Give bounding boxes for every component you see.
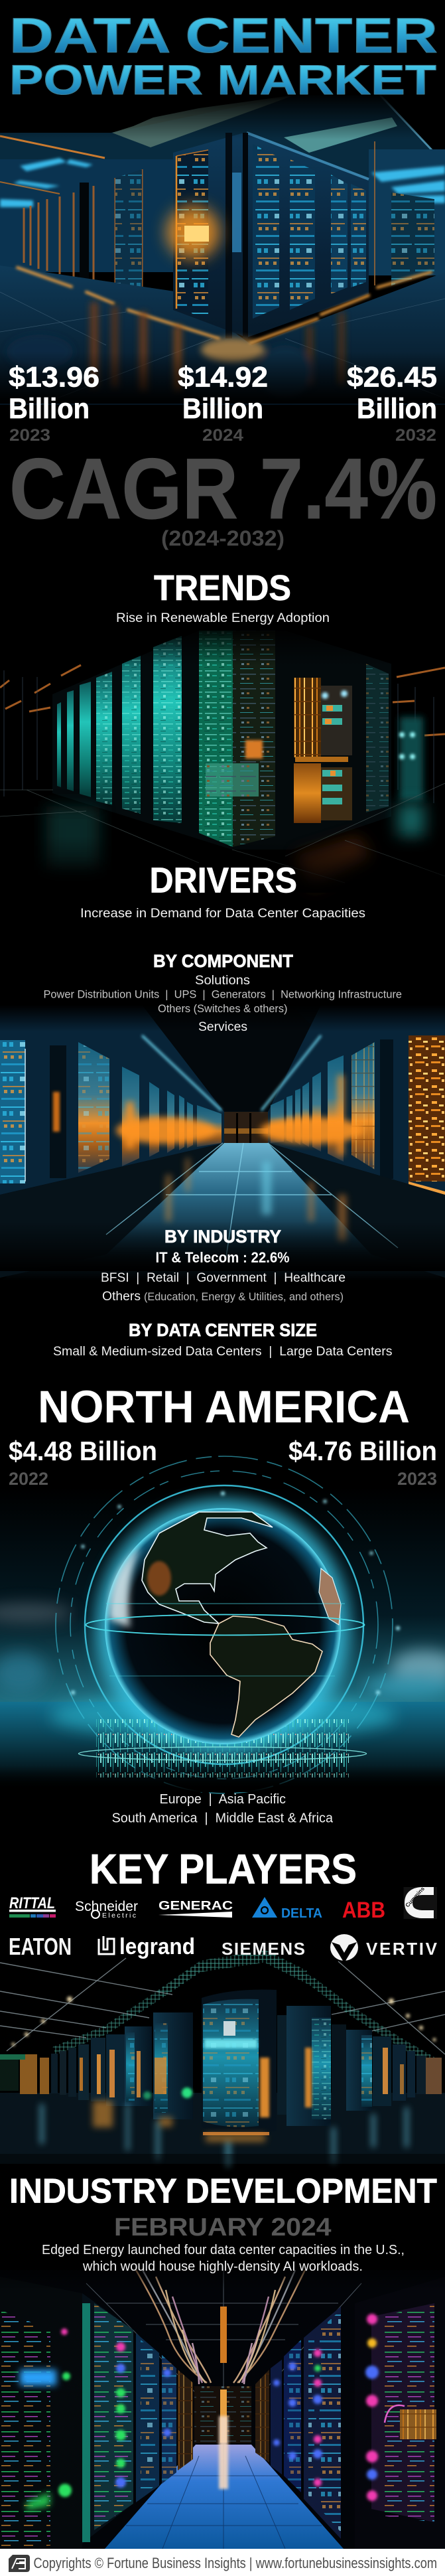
stat: 2023: Billion (9, 393, 90, 425)
segment: by industry: BFSI | Retail | Government | Healthcare (101, 1270, 346, 1285)
logo: Legrand: legrand (119, 1934, 195, 1959)
logo: Cummins: Cummins (404, 1885, 426, 1908)
segment: by industry: Others (102, 1289, 141, 1304)
cable trays (54, 1955, 432, 2061)
logo: Generac (159, 1899, 233, 1918)
panel: globe image (0, 1456, 445, 1793)
heading: trends: TRENDS (154, 568, 291, 608)
segment: by industry: BY INDUSTRY (164, 1227, 281, 1247)
panel: colorful server aisle image (0, 2257, 445, 2549)
section: industry development: which would house highly-density AI workloads. (82, 2259, 363, 2274)
segment: by industry: IT & Telecom : 22.6% (155, 1249, 289, 1266)
panel: corridor image (0, 1005, 445, 1281)
other regions text (112, 1792, 334, 1825)
logo: Siemens: SIEMENS (222, 1939, 305, 1959)
segment: by data center size: Small & Medium-sized Data Centers | Large Data Centers (53, 1344, 393, 1359)
segment: by component: BY COMPONENT (153, 951, 293, 971)
blue floor (105, 2445, 344, 2549)
section: industry development: INDUSTRY DEVELOPMENT (9, 2172, 437, 2210)
segment: by component (44, 951, 402, 1034)
stat: 2022: 2022 (9, 1469, 48, 1489)
section: industry development: Edged Energy launched four data center capacities in the U.S., (42, 2243, 405, 2257)
title: DATA CENTER (9, 8, 438, 63)
left rack wall (0, 2277, 193, 2549)
logo: Schneider Electric: Electric (102, 1912, 136, 1920)
text: driver description: Increase in Demand for Data Center Capacities (80, 906, 365, 921)
stat: 2022: $4.48 Billion (9, 1436, 157, 1466)
stat: 2023: 2023 (9, 426, 50, 445)
stat: 2024: 2024 (202, 426, 243, 445)
stat: 2032: $26.45 (347, 361, 437, 393)
back wall (194, 2386, 251, 2443)
stat: 2023 (9, 361, 99, 445)
panel: server hall image (0, 1955, 445, 2177)
stat: 2023: $13.96 (9, 361, 99, 393)
segment: by industry: (Education, Energy & Utilities, and others) (144, 1291, 344, 1303)
logo: Vertiv: VERTIV (366, 1939, 438, 1959)
continent: South America (210, 1616, 322, 1737)
logo: Delta: DELTA (281, 1906, 322, 1921)
title: POWER MARKET (9, 57, 436, 104)
right rack wall (255, 2277, 445, 2549)
stat: 2022 (9, 1436, 157, 1489)
segment: by component: Power Distribution Units | UPS | Generators | Networking Infrastructure (44, 989, 402, 1001)
stat: 2023: $4.76 Billion (288, 1436, 437, 1466)
central rack (202, 1990, 277, 2135)
panel: hero data center image (0, 93, 445, 405)
title (9, 8, 438, 104)
segment: by industry (101, 1227, 346, 1304)
segment: by component: Services (198, 1020, 247, 1034)
stat: 2032 (347, 361, 437, 445)
stat: 2024 (178, 361, 268, 445)
CAGR callout: (2024-2032) (161, 526, 285, 550)
LED glows (58, 2314, 379, 2501)
key player logos (9, 1885, 438, 1961)
logo: Eaton: EATON (9, 1933, 72, 1960)
logo: Delta (252, 1897, 322, 1921)
segment: by data center size (53, 1320, 393, 1359)
stat: 2024: $14.92 (178, 361, 268, 393)
hanging cables (136, 2270, 305, 2384)
logo: Cummins (403, 1885, 437, 1919)
regional leader: North America: NORTH AMERICA (38, 1381, 410, 1432)
regional leader: North America (9, 1381, 437, 1489)
text: trend description: Rise in Renewable Energy Adoption (116, 611, 330, 625)
segment: by data center size: BY DATA CENTER SIZE (129, 1320, 317, 1340)
panel: server cabinets image (0, 626, 445, 893)
other regions text: Europe | Asia Pacific (159, 1792, 286, 1807)
section: industry development: FEBRUARY 2024 (114, 2214, 332, 2241)
icon: Fortune Business Insights mark (9, 2555, 30, 2572)
stat: 2024: Billion (182, 393, 263, 425)
stat: 2032: Billion (357, 393, 437, 425)
stat: 2023 (288, 1436, 437, 1489)
logo: ABB: ABB (342, 1898, 385, 1923)
heading: key players: KEY PLAYERS (90, 1847, 357, 1893)
logo: Schneider Electric: Schneider (75, 1899, 138, 1914)
continent: Africa edge (319, 1568, 341, 1625)
stat: 2032: 2032 (395, 426, 436, 445)
logo: Vertiv (330, 1934, 438, 1961)
heading: drivers: DRIVERS (150, 860, 297, 900)
continent: North America (142, 1512, 273, 1624)
segment: by component: Others (Switches & others) (158, 1003, 288, 1015)
segment: by component: Solutions (195, 974, 250, 988)
stat: 2023: 2023 (397, 1469, 437, 1489)
logo: Generac: GENERAC (159, 1899, 233, 1912)
section: industry development (9, 2172, 437, 2274)
footer (0, 2549, 445, 2576)
other regions text: South America | Middle East & Africa (112, 1811, 334, 1825)
market size figures (9, 361, 437, 445)
logo: Rittal (9, 1894, 56, 1918)
logo: Rittal: RITTAL (9, 1894, 55, 1912)
